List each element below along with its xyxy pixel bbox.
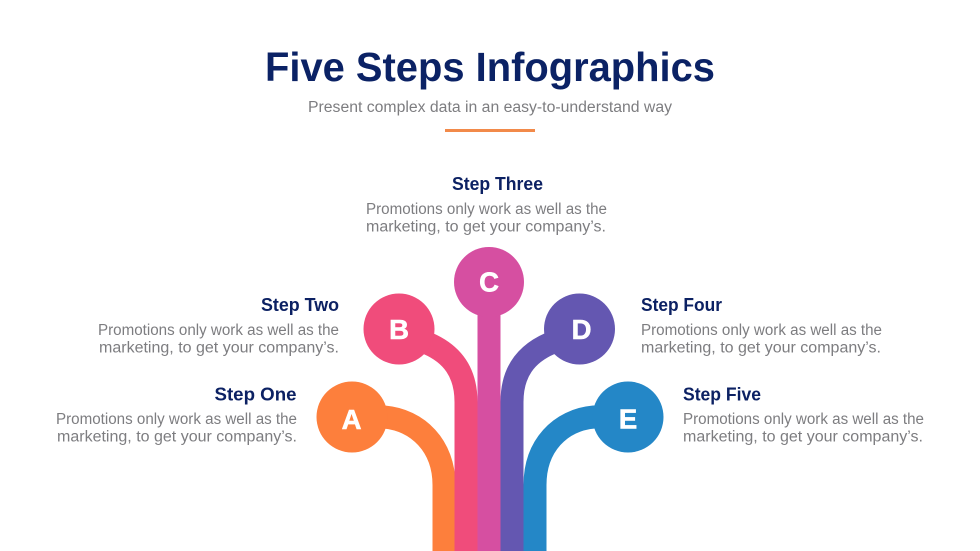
step two text: Promotions only work as well as the — [98, 322, 339, 339]
step three text: Promotions only work as well as the — [366, 201, 607, 218]
step one text — [56, 384, 297, 446]
step two text: Step Two — [261, 294, 339, 315]
step one text: Step One — [214, 384, 296, 404]
branch D: purple: D — [572, 314, 591, 345]
step three text: marketing, to get your company’s. — [366, 218, 606, 236]
title underline — [445, 129, 535, 132]
branch A: orange — [316, 382, 444, 551]
branch B: pink: B — [389, 314, 409, 345]
branch B: pink — [364, 294, 466, 551]
step two text — [98, 294, 339, 356]
branch C: magenta — [454, 247, 524, 551]
branch D: purple — [512, 294, 615, 551]
branch E: blue — [535, 382, 664, 551]
step four text — [641, 294, 882, 356]
step five text: marketing, to get your company’s. — [683, 428, 923, 446]
branch A: orange: A — [342, 404, 362, 435]
step one text: marketing, to get your company’s. — [57, 428, 297, 446]
step five text: Step Five — [683, 384, 761, 404]
step four text: Promotions only work as well as the — [641, 322, 882, 339]
step five text: Promotions only work as well as the — [683, 411, 924, 428]
step five text — [683, 384, 924, 446]
step two text: marketing, to get your company’s. — [99, 340, 339, 356]
step one text: Promotions only work as well as the — [56, 411, 297, 428]
step three text — [366, 173, 607, 236]
subtitle: Present complex data in an easy-to-understand way — [308, 99, 672, 116]
branch C: magenta: C — [479, 266, 499, 298]
branch E: blue: E — [619, 404, 637, 434]
step three text: Step Three — [452, 173, 543, 194]
branch diagram — [316, 247, 664, 551]
step four text: Step Four — [641, 294, 722, 315]
title: Five Steps Infographics — [265, 44, 715, 90]
step four text: marketing, to get your company’s. — [641, 340, 881, 356]
